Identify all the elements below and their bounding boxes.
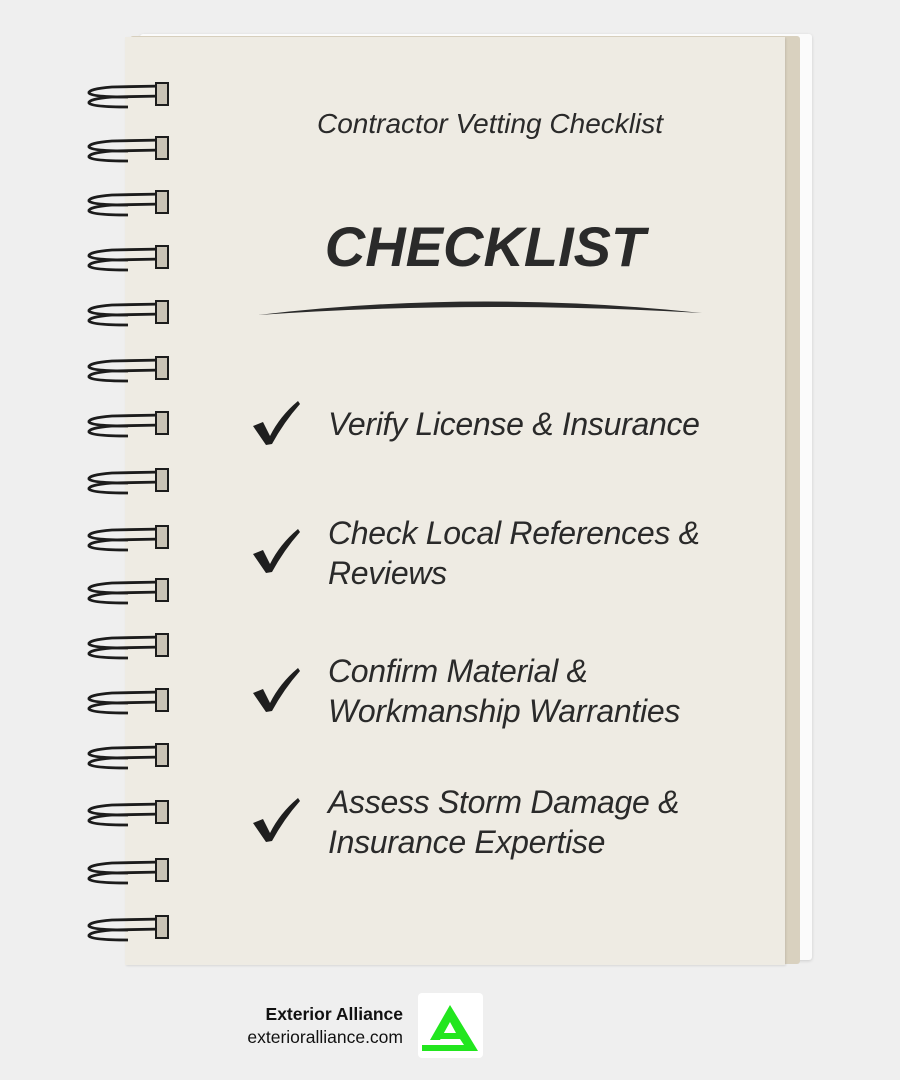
text: Confirm Material & [328, 653, 588, 689]
item 4 [253, 784, 679, 860]
text: Assess Storm Damage & [328, 784, 679, 820]
brand text: Exterior Alliance [266, 1004, 403, 1024]
spiral rings [88, 82, 169, 942]
text: Check Local References & [328, 515, 700, 551]
brand text [247, 1004, 403, 1047]
text: Insurance Expertise [328, 824, 605, 860]
notebook page [125, 37, 785, 965]
brand text: exterioralliance.com [247, 1027, 403, 1047]
notebook back cover [140, 34, 812, 960]
text: Verify License & Insurance [328, 406, 700, 442]
page edges [130, 36, 800, 964]
item 3 [253, 653, 680, 729]
logo [418, 993, 483, 1058]
subtitle: Contractor Vetting Checklist [317, 108, 663, 139]
heading: CHECKLIST [325, 215, 645, 278]
item 1 [253, 401, 700, 445]
item 2 [253, 515, 700, 591]
underline [259, 302, 702, 315]
text: Reviews [328, 555, 447, 591]
text: Workmanship Warranties [328, 693, 680, 729]
